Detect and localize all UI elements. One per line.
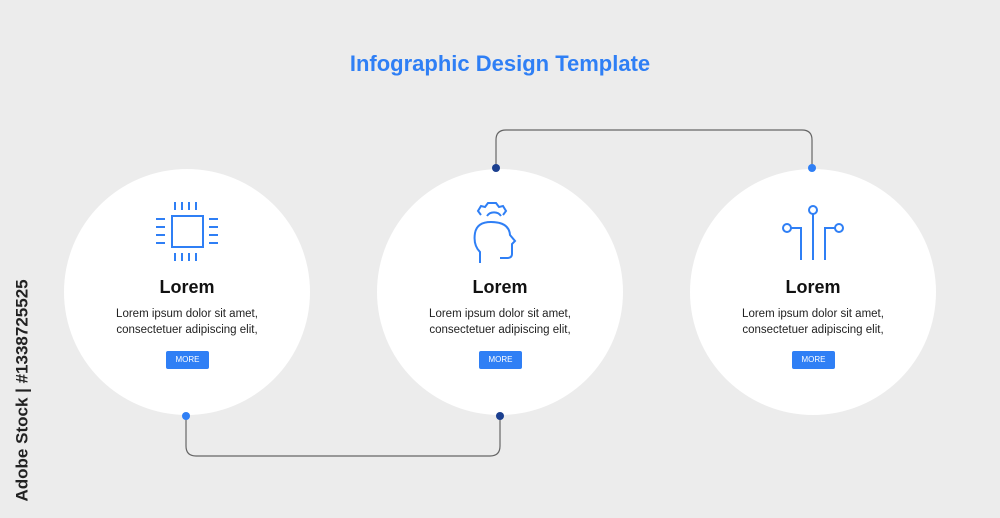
heading: Lorem (159, 277, 214, 297)
panel: step 1 (64, 169, 310, 415)
icon: circuit (782, 205, 844, 260)
text (116, 308, 258, 336)
text (429, 308, 571, 336)
text: consectetuer adipiscing elit, (116, 324, 258, 336)
heading: Lorem (785, 277, 840, 297)
button: MORE (176, 355, 200, 364)
icon: head with gear (474, 202, 516, 263)
button (479, 351, 522, 369)
text: Lorem ipsum dolor sit amet, (116, 308, 258, 320)
text: consectetuer adipiscing elit, (742, 324, 884, 336)
text (742, 308, 884, 336)
button (166, 351, 209, 369)
heading: Lorem (472, 277, 528, 297)
panel: step 3 (690, 169, 936, 415)
text: Lorem ipsum dolor sit amet, (429, 308, 571, 320)
button: MORE (802, 355, 826, 364)
text: Lorem ipsum dolor sit amet, (742, 308, 884, 320)
button: MORE (488, 355, 512, 364)
side caption: Adobe Stock | #1338725525 (12, 279, 32, 502)
icon: chip (156, 202, 218, 261)
button (792, 351, 835, 369)
title: Infographic Design Template (350, 51, 650, 76)
panel: step 2 (377, 169, 623, 415)
text: consectetuer adipiscing elit, (429, 324, 571, 336)
